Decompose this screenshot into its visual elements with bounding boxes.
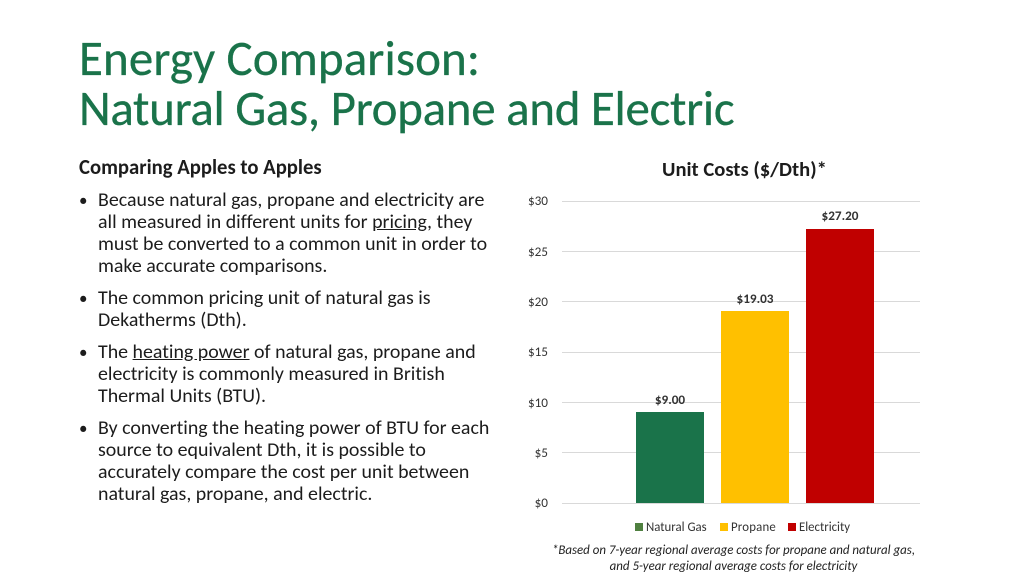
bullet list — [79, 188, 489, 506]
legend: Electricity — [799, 520, 850, 535]
title — [79, 29, 734, 139]
bullet 3: Thermal Units (BTU). — [98, 384, 266, 408]
bullet 1: make accurate comparisons. — [98, 254, 327, 278]
bar: natural gas: $9.00 — [655, 391, 685, 408]
legend: Propane — [731, 520, 776, 535]
bar: propane: $19.03 — [737, 290, 774, 307]
bullet 3: The heating power of natural gas, propane and — [98, 340, 476, 364]
footnote: and 5-year regional average costs for electricity — [610, 559, 857, 574]
bullet 2: • — [79, 288, 87, 309]
bar chart — [528, 192, 920, 535]
bullet 1: • — [79, 190, 87, 211]
bullet 4: • — [79, 418, 87, 439]
bar: electricity — [806, 207, 874, 503]
bullet 4 — [79, 416, 489, 506]
bullet 3 — [79, 340, 476, 408]
footnote — [552, 543, 915, 574]
y axis labels: $25 — [528, 243, 548, 260]
y axis labels: $0 — [535, 494, 548, 511]
chart title: Unit Costs ($/Dth)* — [662, 156, 827, 182]
bullet 2: The common pricing unit of natural gas is — [98, 286, 431, 310]
y axis labels: $15 — [528, 343, 548, 360]
bar: propane — [721, 290, 789, 503]
bullet 4: accurately compare the cost per unit between — [98, 460, 469, 484]
y axis labels: $10 — [528, 394, 548, 411]
bullet 2: Dekatherms (Dth). — [98, 308, 247, 332]
footnote: *Based on 7-year regional average costs for propane and natural gas, — [552, 543, 915, 558]
y axis labels: $20 — [528, 293, 548, 310]
subheading: Comparing Apples to Apples — [79, 154, 322, 180]
bullet 3: electricity is commonly measured in British — [98, 362, 445, 386]
title: Natural Gas, Propane and Electric — [79, 79, 734, 139]
bullet 1: must be converted to a common unit in order to — [98, 232, 487, 256]
bullet 4: By converting the heating power of BTU for each — [98, 416, 489, 440]
bullet 2 — [79, 286, 431, 332]
bullet 1: all measured in different units for pricing, they — [98, 210, 472, 234]
y axis labels — [528, 192, 548, 511]
y axis labels: $30 — [528, 192, 548, 209]
bullet 4: natural gas, propane, and electric. — [98, 482, 372, 506]
legend — [635, 520, 850, 535]
bar: natural gas — [636, 391, 704, 503]
y axis labels: $5 — [535, 444, 548, 461]
legend: Natural Gas — [646, 520, 707, 535]
title: Energy Comparison: — [79, 29, 480, 89]
bullet 3: • — [79, 342, 87, 363]
bar: electricity: $27.20 — [822, 207, 859, 224]
bullet 1: Because natural gas, propane and electricity are — [98, 188, 484, 212]
bullet 4: source to equivalent Dth, it is possible to — [98, 438, 426, 462]
bullet 1 — [79, 188, 487, 278]
